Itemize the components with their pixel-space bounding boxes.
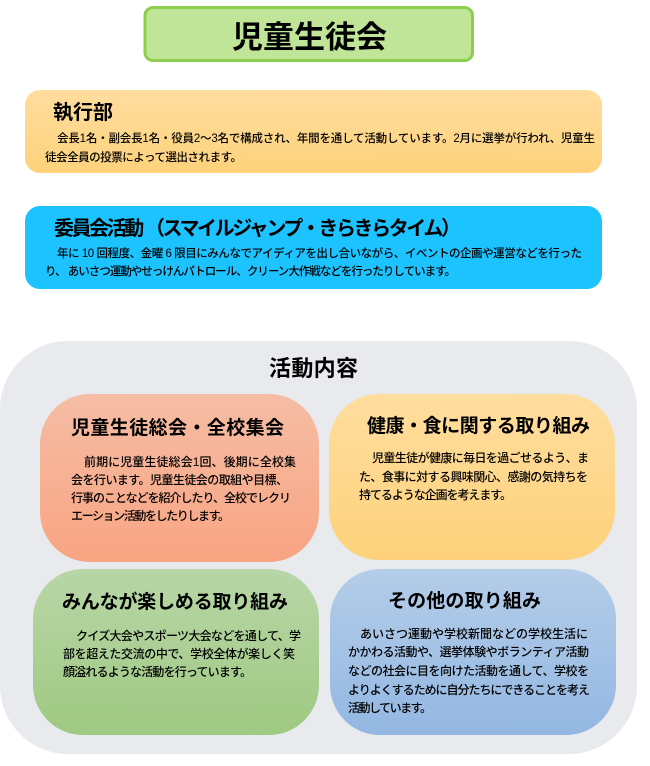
card: health and food [329,394,615,560]
text: other description: などの社会に目を向けた活動を通して、学校を [348,663,589,678]
text: health and food description: 児童生徒が健康に毎日を過ごせるよう、ま [372,450,589,465]
heading: committee: 委員会活動 （スマイルジャンプ・きらきらタイム） [54,217,461,240]
text: other description: よりよくするために自分たちにできることを考え [348,683,590,697]
text: assembly description: 行事のことなどを紹介したり、全校でレクリ [71,490,291,505]
text: fun for everyone description: 顔溢れるような活動を行っています。 [63,664,252,679]
heading: executive: 執行部 [53,101,113,124]
heading: activities: 活動内容 [269,356,358,381]
card: fun for everyone [33,569,319,735]
text: fun for everyone description: 部を超えた交流の中で、学校全体が楽しく笑 [63,646,295,661]
text: fun for everyone description [63,628,301,679]
heading: health and food: 健康・食に関する取り組み [367,415,590,437]
text: fun for everyone description: クイズ大会やスポーツ大会などを通して、学 [76,628,301,643]
text: assembly description [71,454,296,523]
heading: assembly: 児童生徒総会・全校集会 [71,417,284,439]
text: executive description [45,131,595,164]
text: committee description [45,246,582,278]
text: assembly description: 前期に児童生徒総会1回、後期に全校集 [84,454,296,469]
panel: committee [25,206,602,289]
panel: executive [25,90,602,173]
title box [145,8,472,60]
text: other description: あいさつ運動や学校新聞などの学校生活に [360,626,588,641]
text: health and food description [359,450,589,502]
text: other description: 活動しています。 [348,700,432,715]
title: 児童生徒会 [232,20,387,55]
card: assembly [40,394,319,562]
text: health and food description: 持てるような企画を考えます。 [359,487,512,502]
text: executive description: 徒会全員の投票によって選出されます。 [45,150,242,164]
text: other description: かかわる活動や、選挙体験やボランティア活動 [348,644,589,659]
panel: activities [0,341,637,754]
heading: fun for everyone: みんなが楽しめる取り組み [62,590,288,613]
text: executive description: 会長1名・副会長1名・役員2～3名で構成され、年間を通して活動しています。2月に選挙が行われ、児童生 [57,131,595,145]
card: other [330,569,616,735]
text: committee description: 年に 10 回程度、金曜 6 限目にみんなでアイディアを出し合いながら、イベントの企画や運営などを行った [57,246,582,260]
text: assembly description: 会を行います。児童生徒会の取組や目標、 [71,472,288,487]
text: other description [348,626,590,715]
text: health and food description: た、食事に対する興味関心、感謝の気持ちを [359,469,588,484]
text: committee description: り、 あいさつ運動やせっけんパトロール、クリーン大作戦などを行ったりしています。 [45,264,456,278]
text: assembly description: エーション活動をしたりします。 [71,508,230,523]
heading: other: その他の取り組み [388,590,541,612]
